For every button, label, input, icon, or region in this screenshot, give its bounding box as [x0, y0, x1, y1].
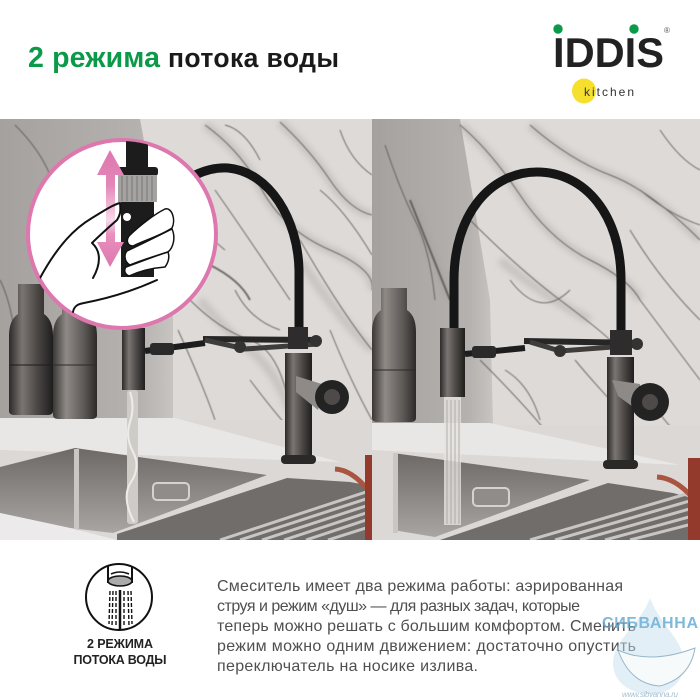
overflow drain — [473, 488, 509, 506]
faucet — [195, 168, 299, 330]
niche shadow — [372, 119, 493, 425]
drying rack — [530, 493, 688, 540]
overflow drain — [153, 483, 189, 500]
water shower — [444, 397, 461, 525]
marble blotches — [200, 122, 372, 410]
watermark: Sibvanna: www.sibvanna.ru — [622, 690, 679, 699]
title: потока воды — [168, 43, 339, 73]
sink left — [393, 453, 590, 537]
marble veins — [385, 125, 700, 445]
arrow up and down — [97, 150, 124, 267]
watermark: Sibvanna: СИБВАННА — [602, 615, 698, 632]
bottle — [372, 288, 416, 422]
description text: струя и режим «душ» — для разных задач, которые — [217, 598, 580, 615]
watermark: Sibvanna — [602, 598, 698, 699]
description text: Смеситель имеет два режима работы: аэрированная — [217, 578, 623, 595]
description text: переключатель на носике излива. — [217, 658, 478, 675]
faucet close-up — [117, 135, 158, 277]
bottles — [9, 284, 53, 415]
panel: left photo, aerated stream — [0, 119, 373, 540]
countertop — [214, 420, 372, 426]
faucet — [454, 172, 621, 330]
drying rack — [220, 490, 372, 540]
pot — [657, 477, 692, 497]
countertop — [540, 425, 691, 446]
logo: IDDIS kitchen: IDDIS — [553, 29, 664, 76]
sink right — [117, 478, 372, 540]
description text: теперь можно решать с большим комфортом. Сменить — [217, 618, 636, 635]
pot handle — [335, 469, 368, 490]
logo: IDDIS kitchen: kitchen — [584, 85, 634, 99]
water stream — [127, 390, 138, 524]
description text: режим можно одним движением: достаточно опустить — [217, 638, 636, 655]
title: 2 режима — [28, 42, 161, 74]
icon: two-mode spout — [86, 564, 152, 630]
logo: IDDIS kitchen — [553, 24, 670, 103]
callout: hand operating switch — [28, 135, 216, 328]
marble blotches — [461, 122, 700, 323]
icon caption: 2 РЕЖИМА — [87, 637, 153, 651]
panel: right photo, shower stream — [372, 119, 700, 540]
logo: IDDIS kitchen: ® — [664, 26, 670, 35]
icon caption: ПОТОКА ВОДЫ — [74, 653, 166, 667]
description text — [217, 578, 636, 675]
marble veins — [0, 122, 372, 440]
niche shadow — [0, 119, 173, 420]
hand — [40, 203, 174, 312]
sink right — [440, 483, 700, 540]
sink left — [0, 448, 267, 533]
